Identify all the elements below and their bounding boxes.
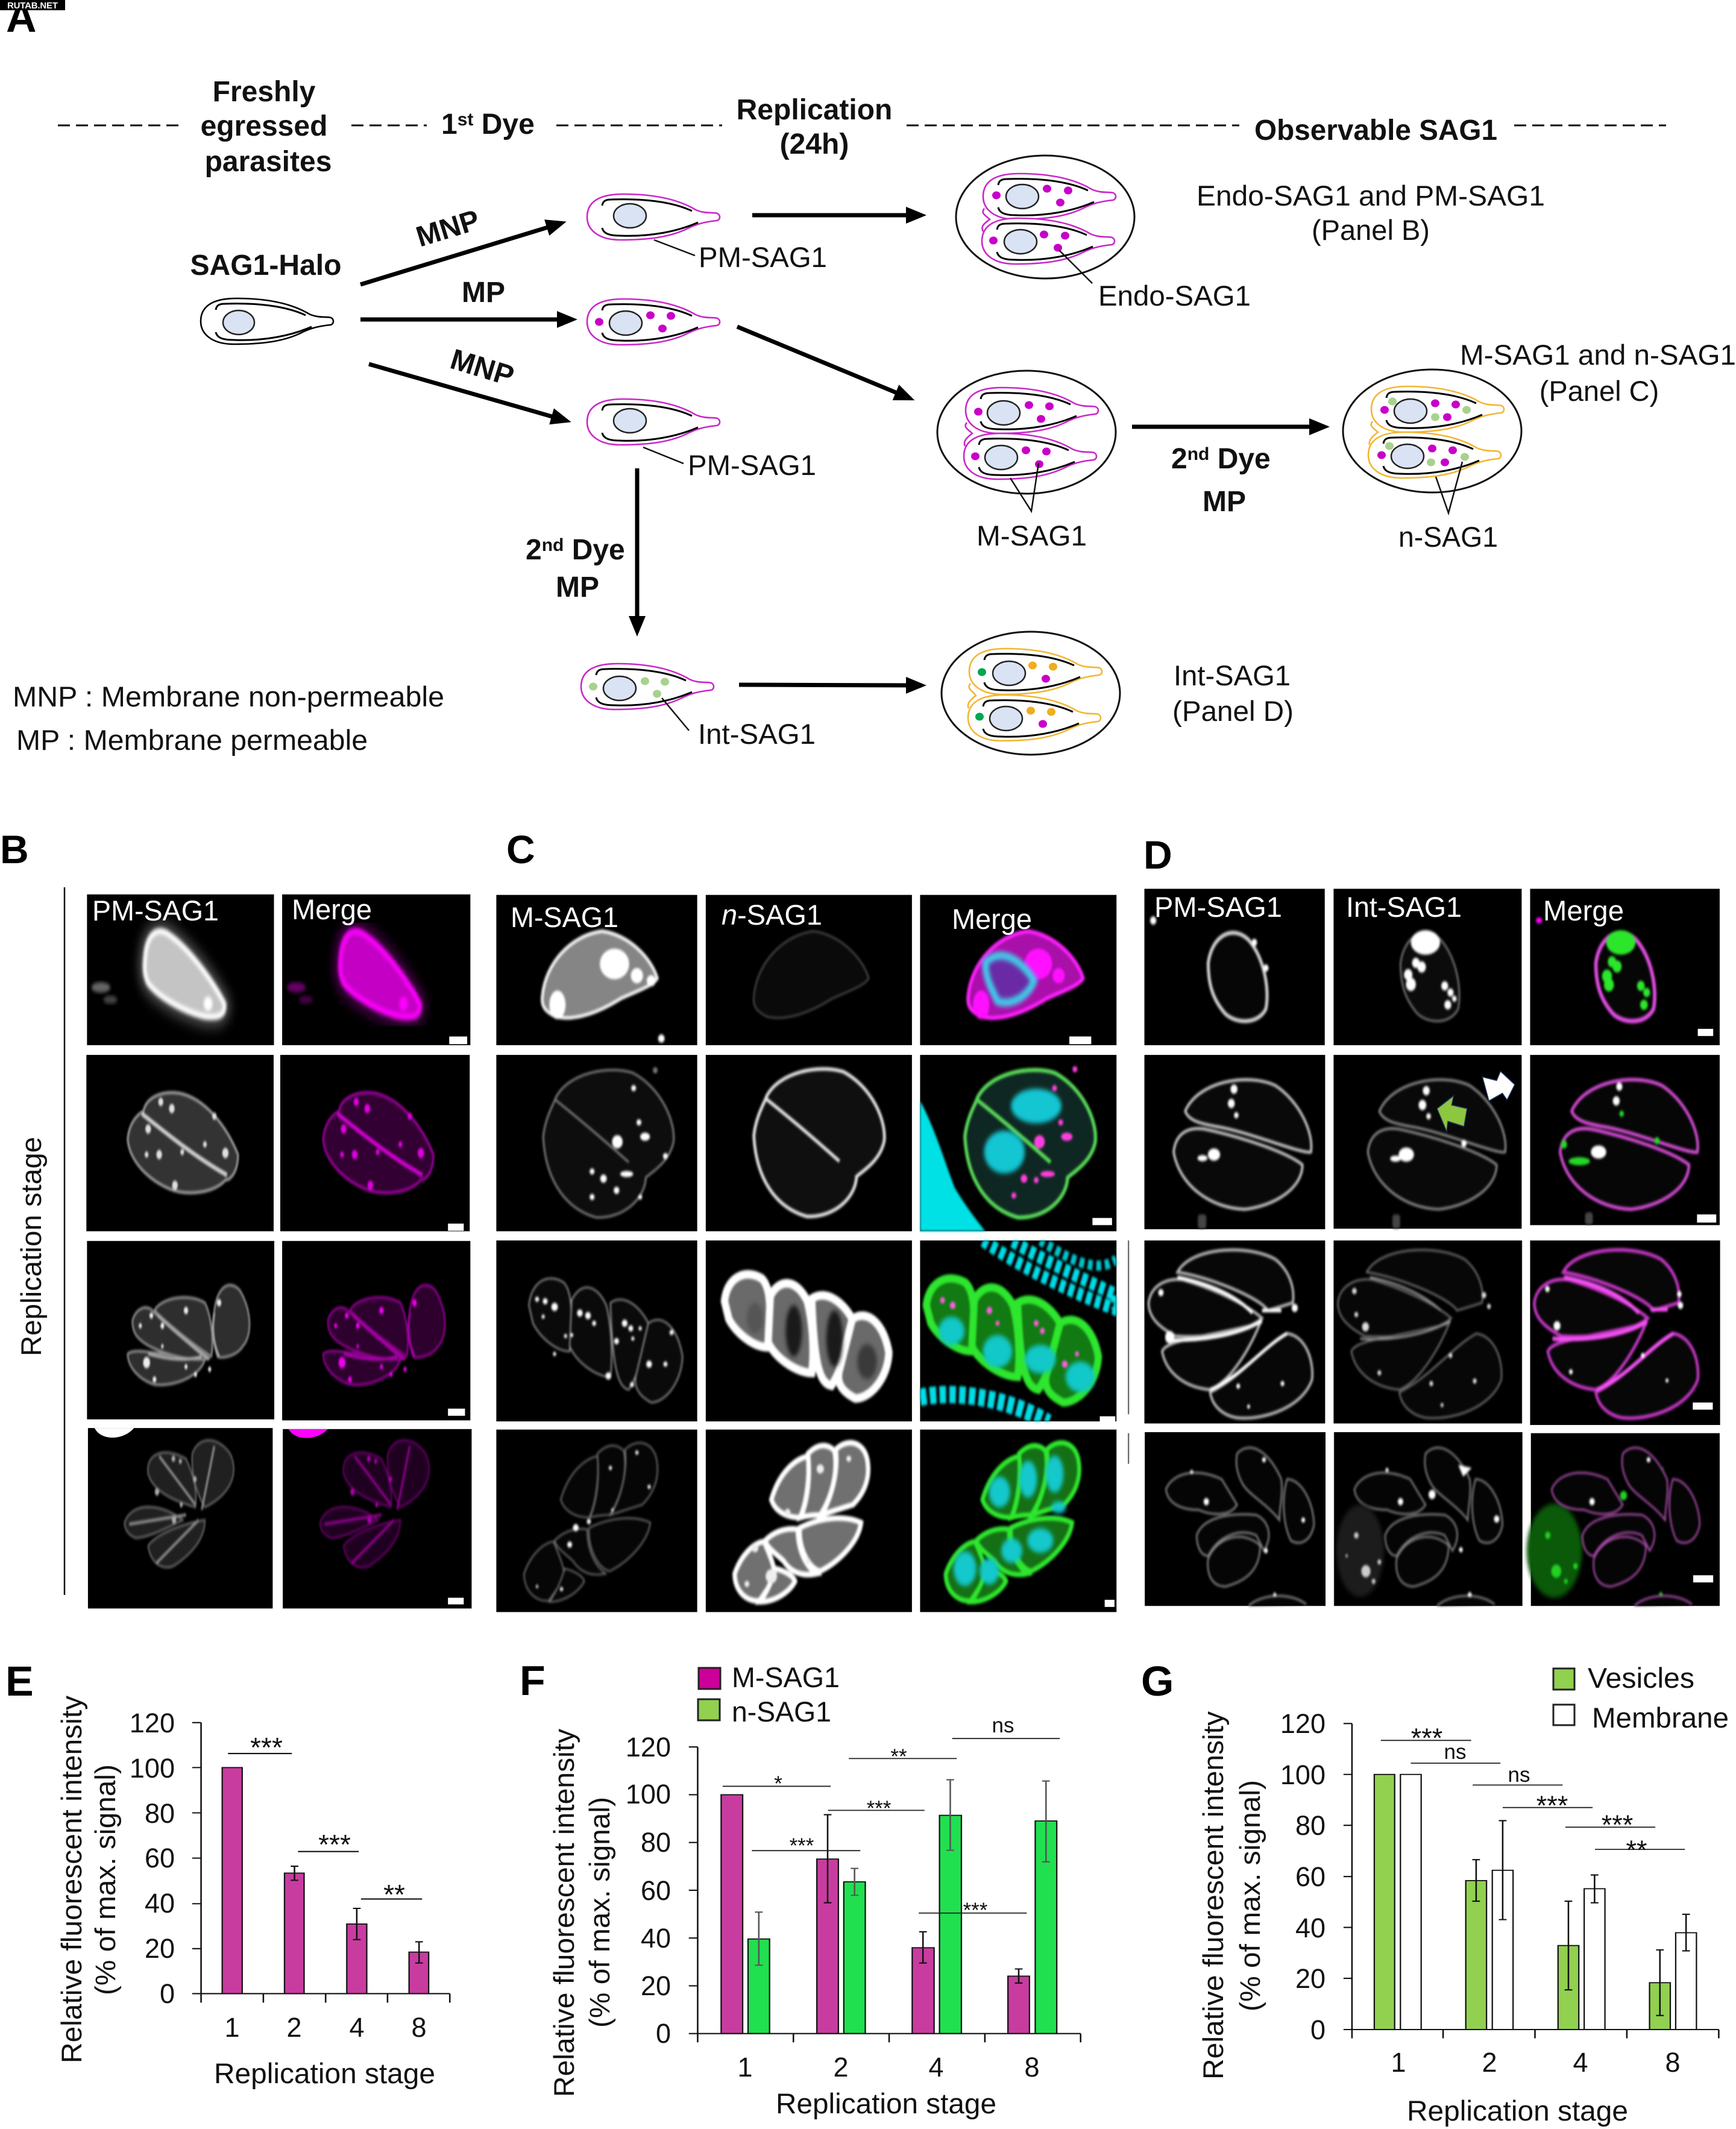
icon: white arrow pointing at membrane [1482, 1071, 1515, 1101]
heading: freshly egressed parasites: parasites [205, 146, 332, 178]
x axis numbers E: 1 [224, 2012, 240, 2043]
y axis numbers F: 60 [641, 1875, 671, 1906]
significance labels F: * [774, 1772, 782, 1796]
legend G: Membrane [1592, 1702, 1729, 1734]
row 4 [524, 1443, 1079, 1602]
y axis title G: (% of max. signal) [1234, 1780, 1266, 2011]
panel letter E: E [5, 1658, 34, 1705]
y axis numbers G: 20 [1295, 1963, 1326, 1994]
arrow labels MNP MP MNP: MNP [447, 344, 518, 392]
row 2 [543, 1066, 1095, 1231]
y axis numbers G: 80 [1295, 1810, 1326, 1841]
icon: green arrow pointing at vesicle [1437, 1096, 1467, 1131]
label: panel C description: (Panel C) [1539, 375, 1659, 407]
image captions C: Merge [952, 903, 1032, 935]
label: second dye MP right [1171, 443, 1271, 518]
panel G: bar chart of vesicles and membrane [1141, 1658, 1729, 2127]
y axis numbers E: 80 [145, 1798, 175, 1829]
icon: endo parasite with magenta dots [587, 299, 720, 345]
bars and axes F [689, 1738, 1081, 2042]
y axis title F: Relative fluorescent intensity [548, 1728, 580, 2097]
heading: replication 24h: Replication [737, 94, 892, 126]
x axis numbers E: 2 [286, 2012, 302, 2043]
panel F: bar chart of M-SAG1 and n-SAG1 [520, 1657, 1081, 2119]
arrows from starting parasite [360, 223, 573, 421]
label: panel B description: (Panel B) [1312, 214, 1430, 246]
x axis numbers F: 8 [1024, 2052, 1040, 2083]
y axis title G [1197, 1711, 1266, 2080]
image captions B [92, 893, 372, 926]
panel B: PM-SAG1 microscopy [0, 827, 471, 1608]
label: n-SAG1 with leaders [1398, 462, 1498, 553]
panel letter F: F [520, 1657, 546, 1704]
label: second dye MP left: MP [556, 571, 599, 603]
y axis title E: Relative fluorescent intensity [55, 1696, 87, 2063]
y axis numbers E: 40 [145, 1888, 175, 1919]
icon: PM-SAG1 parasite lower [587, 399, 720, 445]
abbreviation key [13, 681, 444, 756]
vacuole: M-SAG1 and n-SAG1 [1343, 370, 1521, 492]
significance labels F: *** [790, 1834, 814, 1858]
panel letter D: D [1143, 832, 1172, 877]
bars and axes E [192, 1723, 450, 2002]
vacuole: M-SAG1 [937, 371, 1116, 494]
watermark banner: RUTAB.NET [7, 1, 58, 11]
image captions D: Merge [1543, 895, 1624, 926]
label: panel C description [1460, 339, 1736, 407]
x axis numbers G: 4 [1573, 2047, 1588, 2078]
significance stars E: *** [318, 1829, 351, 1860]
header row dashed timeline [58, 124, 1666, 127]
y axis numbers G: 40 [1295, 1913, 1326, 1943]
y axis numbers F: 80 [641, 1827, 671, 1858]
heading: observable SAG1: Observable SAG1 [1254, 115, 1497, 146]
x axis numbers E [224, 2012, 427, 2043]
significance labels G: *** [1536, 1790, 1568, 1821]
row 1 [542, 931, 1083, 1043]
legend F: M-SAG1 [732, 1661, 840, 1693]
image captions B: Merge [292, 893, 372, 925]
label: panel B description [1197, 180, 1545, 246]
y axis title E: (% of max. signal) [89, 1764, 121, 1995]
label: panel D description: Int-SAG1 [1174, 659, 1291, 691]
x axis numbers F: 4 [928, 2052, 944, 2083]
y axis numbers E: 60 [145, 1843, 175, 1873]
y axis numbers E [130, 1708, 175, 2009]
significance labels F [774, 1714, 1014, 1922]
panel A: labelling workflow diagram [6, 0, 1736, 756]
x axis numbers G: 1 [1391, 2047, 1406, 2078]
image captions C: M-SAG1 [511, 901, 618, 933]
legend F: n-SAG1 [732, 1696, 831, 1728]
row 1 [1150, 916, 1655, 1021]
y axis numbers E: 100 [130, 1753, 175, 1784]
leader lines and labels near parasites: PM-SAG1 [688, 449, 816, 481]
panel C: M-SAG1 and n-SAG1 microscopy [496, 827, 1129, 1612]
arrow labels MNP MP MNP [412, 204, 518, 392]
heading: replication 24h [737, 94, 892, 160]
x axis numbers G: 2 [1482, 2047, 1497, 2078]
legend G [1553, 1662, 1729, 1734]
label: panel D description [1172, 659, 1294, 727]
leader lines and labels near parasites [643, 240, 827, 750]
significance labels G [1411, 1723, 1647, 1866]
icon: Int-SAG1 parasite [581, 664, 714, 709]
legend G: Vesicles [1588, 1662, 1694, 1694]
legend F [698, 1661, 840, 1728]
panel letter C: C [506, 827, 535, 872]
y axis numbers G: 100 [1280, 1759, 1326, 1790]
x axis numbers E: 8 [411, 2012, 427, 2043]
significance labels F: ** [890, 1745, 907, 1769]
label: second dye MP right: MP [1203, 486, 1246, 518]
icon: starting parasite [201, 298, 333, 344]
label: Endo-SAG1 with leader [1059, 250, 1251, 312]
x axis numbers G [1391, 2047, 1681, 2078]
row 4 [1166, 1448, 1700, 1606]
heading: 1st dye: st [458, 110, 473, 130]
label: SAG1-Halo: SAG1-Halo [190, 250, 341, 281]
significance stars E [250, 1732, 405, 1910]
y axis numbers G: 0 [1310, 2014, 1326, 2045]
arrows toward vacuoles [637, 215, 1325, 685]
heading: 1st dye: 1 [441, 108, 458, 140]
image captions C: n-SAG1 [722, 899, 822, 931]
heading: 1st dye: Dye [473, 108, 535, 140]
y axis numbers G [1280, 1708, 1326, 2045]
label: second dye MP left [526, 534, 625, 603]
x axis numbers G: 8 [1665, 2047, 1681, 2078]
label: panel D description: (Panel D) [1172, 695, 1294, 727]
micrograph grid B [86, 895, 471, 1608]
significance labels G: ** [1626, 1835, 1647, 1866]
y axis numbers F: 100 [626, 1779, 671, 1810]
label: n-SAG1 with leaders: n-SAG1 [1398, 521, 1498, 553]
y axis title F [548, 1728, 615, 2097]
image captions D: PM-SAG1 [1154, 891, 1282, 923]
heading: freshly egressed parasites [201, 76, 332, 178]
row 2 [1174, 1080, 1698, 1228]
label: second dye MP right: Dye [1209, 443, 1271, 475]
significance labels G: *** [1411, 1723, 1442, 1753]
label: second dye MP left: nd [542, 535, 564, 555]
icon: PM-SAG1 parasite [587, 194, 720, 240]
panel D: PM-SAG1 and Int-SAG1 microscopy [1143, 832, 1720, 1606]
y axis numbers G: 60 [1295, 1861, 1326, 1892]
label: M-SAG1 with leaders: M-SAG1 [976, 520, 1087, 552]
label: second dye MP left: 2 [526, 534, 542, 566]
vacuole: Int-SAG1 [942, 632, 1120, 755]
arrow labels MNP MP MNP: MNP [412, 204, 483, 253]
micrograph grid C [496, 895, 1129, 1612]
label: Endo-SAG1 with leader: Endo-SAG1 [1098, 280, 1251, 312]
row 3 [529, 1241, 1116, 1423]
y axis title E [55, 1695, 121, 2063]
label: second dye MP right: nd [1187, 444, 1209, 464]
significance labels G: ns [1444, 1740, 1466, 1764]
y axis numbers F: 0 [656, 2018, 671, 2049]
significance stars E: *** [250, 1732, 283, 1763]
y axis title F: (% of max. signal) [583, 1797, 615, 2028]
arrow labels MNP MP MNP: MP [462, 277, 505, 309]
bars and axes G [1344, 1723, 1719, 2038]
abbreviation key: MP : Membrane permeable [16, 724, 368, 756]
y axis numbers G: 120 [1280, 1708, 1326, 1739]
significance labels F: *** [963, 1899, 988, 1922]
y axis numbers E: 0 [160, 1978, 175, 2009]
leader lines and labels near parasites: PM-SAG1 [699, 241, 827, 273]
significance labels G: ns [1508, 1763, 1530, 1787]
significance labels F: *** [867, 1797, 892, 1820]
x axis title E: Replication stage [214, 2057, 435, 2089]
label: second dye MP right: 2 [1171, 443, 1187, 475]
abbreviation key: MNP : Membrane non-permeable [13, 681, 444, 712]
heading: replication 24h: (24h) [780, 128, 849, 160]
label: panel B description: Endo-SAG1 and PM-SAG1 [1197, 180, 1545, 212]
significance labels G: *** [1602, 1810, 1633, 1840]
row 3 [1149, 1250, 1698, 1418]
image captions B: PM-SAG1 [92, 895, 219, 926]
heading: freshly egressed parasites: egressed [201, 110, 327, 142]
x axis title F: Replication stage [776, 2087, 996, 2119]
y axis numbers F: 20 [641, 1970, 671, 2001]
y axis numbers F: 120 [626, 1732, 671, 1763]
image captions D [1154, 891, 1624, 926]
x axis numbers F: 2 [833, 2052, 849, 2083]
significance labels F: ns [992, 1714, 1014, 1737]
x axis numbers F [737, 2052, 1040, 2083]
y axis numbers F [626, 1732, 671, 2049]
label: second dye MP left: Dye [564, 534, 625, 566]
significance stars E: ** [383, 1879, 405, 1910]
y axis numbers E: 20 [145, 1933, 175, 1964]
y axis numbers E: 120 [130, 1708, 175, 1738]
y axis numbers F: 40 [641, 1923, 671, 1954]
panel letter G: G [1141, 1658, 1174, 1705]
y axis title G: Relative fluorescent intensity [1197, 1711, 1229, 2080]
side axis label: replication stage: Replication stage [15, 1137, 47, 1356]
label: panel C description: M-SAG1 and n-SAG1 [1460, 339, 1736, 371]
panel letter B: B [0, 827, 29, 872]
label: M-SAG1 with leaders [976, 463, 1087, 552]
image captions D: Int-SAG1 [1346, 891, 1462, 923]
micrograph grid D [1145, 888, 1720, 1606]
image captions C [511, 899, 1032, 935]
vacuole: Endo-SAG1 and PM-SAG1 [956, 156, 1134, 278]
x axis title G: Replication stage [1407, 2095, 1628, 2127]
leader lines and labels near parasites: Int-SAG1 [698, 718, 816, 750]
heading: freshly egressed parasites: Freshly [213, 76, 316, 108]
x axis numbers F: 1 [737, 2052, 753, 2083]
x axis numbers E: 4 [349, 2012, 365, 2043]
panel E: bar chart of PM-SAG1 intensity [5, 1658, 450, 2089]
